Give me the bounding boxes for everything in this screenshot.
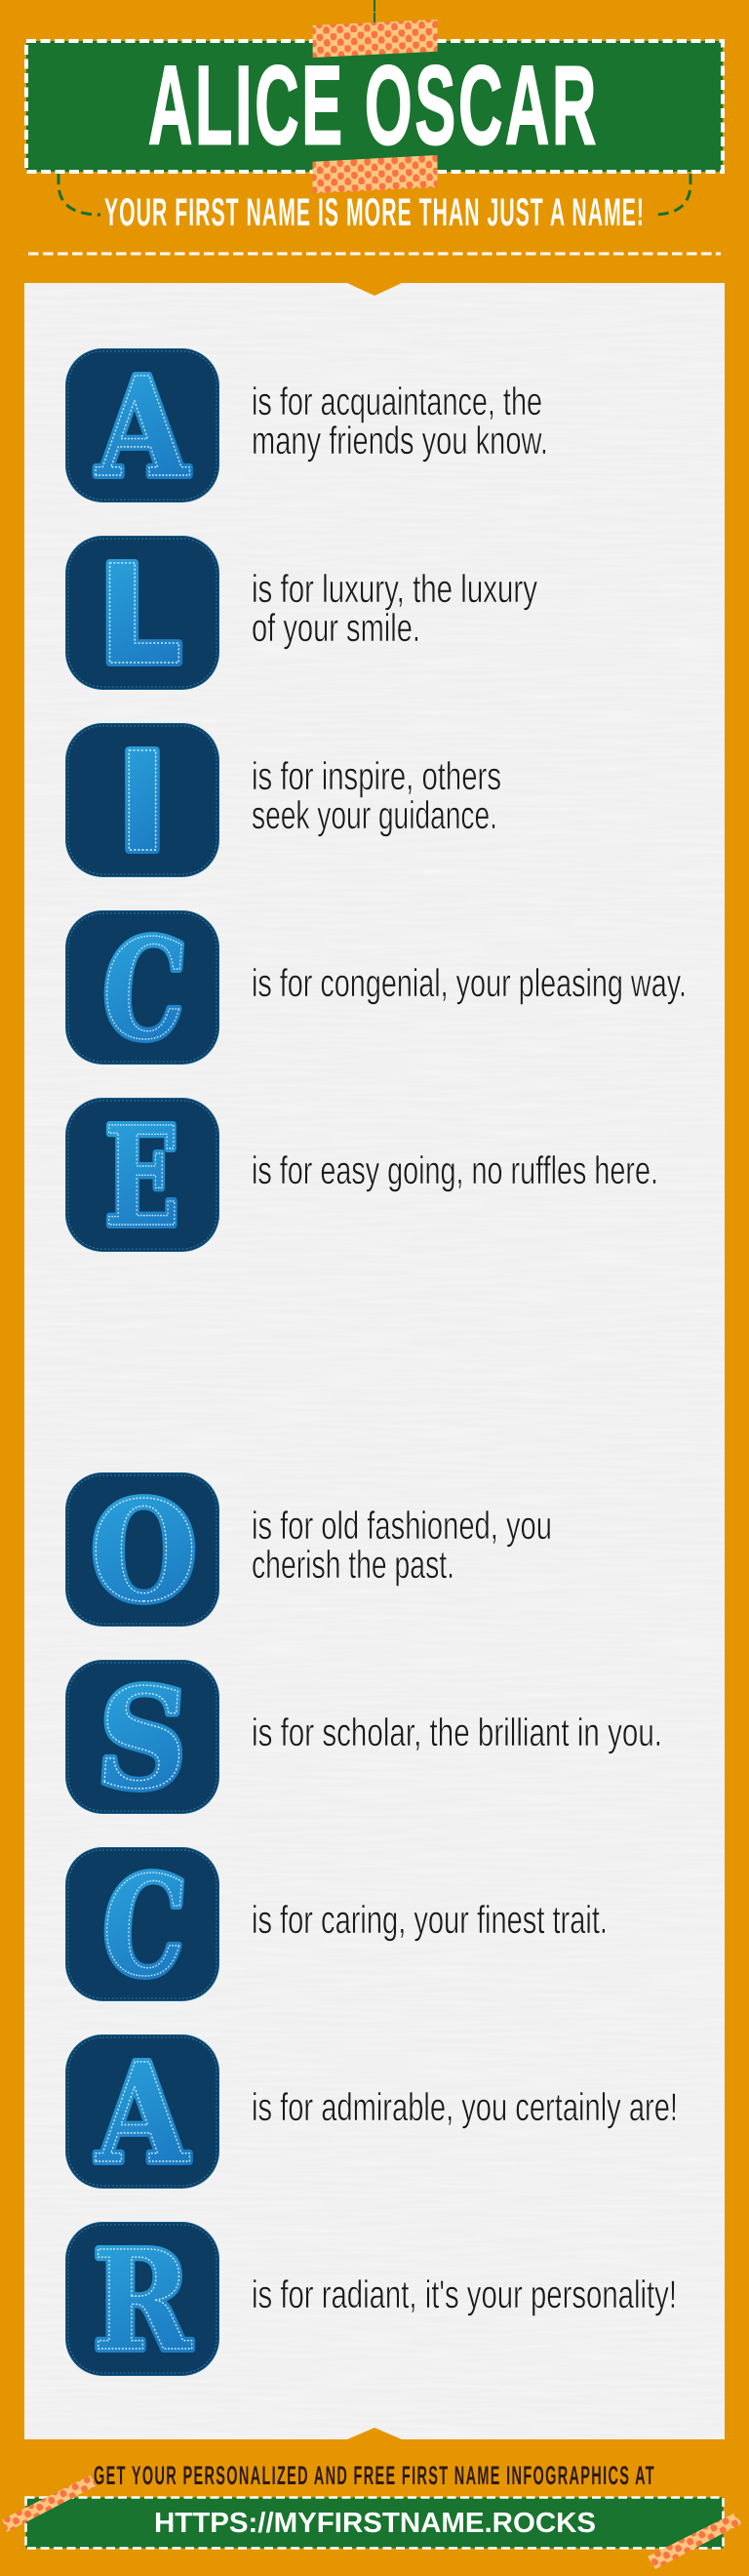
- hanging string: [374, 0, 375, 23]
- text: L line: is for luxury, the luxury: [252, 568, 537, 611]
- icon: letter A: A: [95, 348, 190, 508]
- text: O line 2: cherish the past.: [252, 1544, 454, 1587]
- icon: letter C: C: [98, 909, 191, 1070]
- text: I line 2: seek your guidance.: [252, 794, 497, 837]
- icon: letter C: C: [98, 1846, 191, 2007]
- row: C congenial: [66, 909, 687, 1070]
- icon: letter O: O: [91, 1472, 197, 1632]
- text: O line: is for old fashioned, you: [252, 1505, 552, 1548]
- icon: letter A: A: [95, 2034, 190, 2194]
- text: I line: is for inspire, others: [252, 755, 501, 798]
- row: R radiant: [66, 2222, 677, 2382]
- icon: letter I: [66, 724, 218, 883]
- tape: footer left: [2, 2475, 98, 2532]
- text: L line 2: of your smile.: [252, 607, 420, 650]
- icon: letter E: E: [104, 1098, 179, 1258]
- row: I inspire: [66, 724, 501, 883]
- curved connector: right: [652, 174, 690, 215]
- icon: letter L: [66, 537, 218, 696]
- row: A admirable: [66, 2034, 678, 2194]
- text: C line: is for caring, your finest trait.: [252, 1899, 608, 1942]
- tape: bottom: [312, 155, 437, 193]
- icon: letter O: O: [91, 1472, 197, 1632]
- row: L luxury: [66, 537, 537, 696]
- icon: letter A: [66, 348, 218, 508]
- icon: letter L: L: [98, 537, 182, 696]
- icon: letter C: C: [98, 1846, 191, 2007]
- icon: letter I: I: [116, 724, 169, 883]
- text: A line 2: many friends you know.: [252, 420, 548, 463]
- footer banner: [25, 2498, 724, 2549]
- icon: letter A: [66, 2034, 218, 2194]
- icon: letter L: L: [98, 537, 182, 696]
- curved connector: left: [59, 174, 100, 215]
- row: S scholar: [66, 1659, 662, 1820]
- row: C caring: [66, 1846, 608, 2007]
- icon: letter S: S: [93, 1659, 193, 1820]
- row: E easy going: [66, 1098, 658, 1258]
- icon: letter R: R: [93, 2222, 192, 2382]
- title banner: [26, 41, 723, 172]
- divider: [28, 252, 721, 256]
- icon: letter A: A: [95, 2034, 190, 2194]
- icon: letter E: [66, 1098, 218, 1258]
- row: O old fashioned: [66, 1472, 552, 1632]
- icon: letter E: E: [104, 1098, 179, 1258]
- row: A acquaintance: [66, 348, 548, 508]
- icon: letter I: I: [116, 724, 169, 883]
- icon: letter R: R: [93, 2222, 192, 2382]
- panel: letters paper: [24, 283, 725, 2439]
- icon: letter C: C: [98, 909, 191, 1070]
- footer url: HTTPS://MYFIRSTNAME.ROCKS: [154, 2508, 596, 2539]
- icon: letter S: S: [93, 1659, 193, 1820]
- tape: footer right: [648, 2514, 742, 2569]
- icon: letter A: A: [95, 348, 190, 508]
- tape: top: [313, 20, 437, 58]
- text: A line: is for acquaintance, the: [252, 381, 542, 423]
